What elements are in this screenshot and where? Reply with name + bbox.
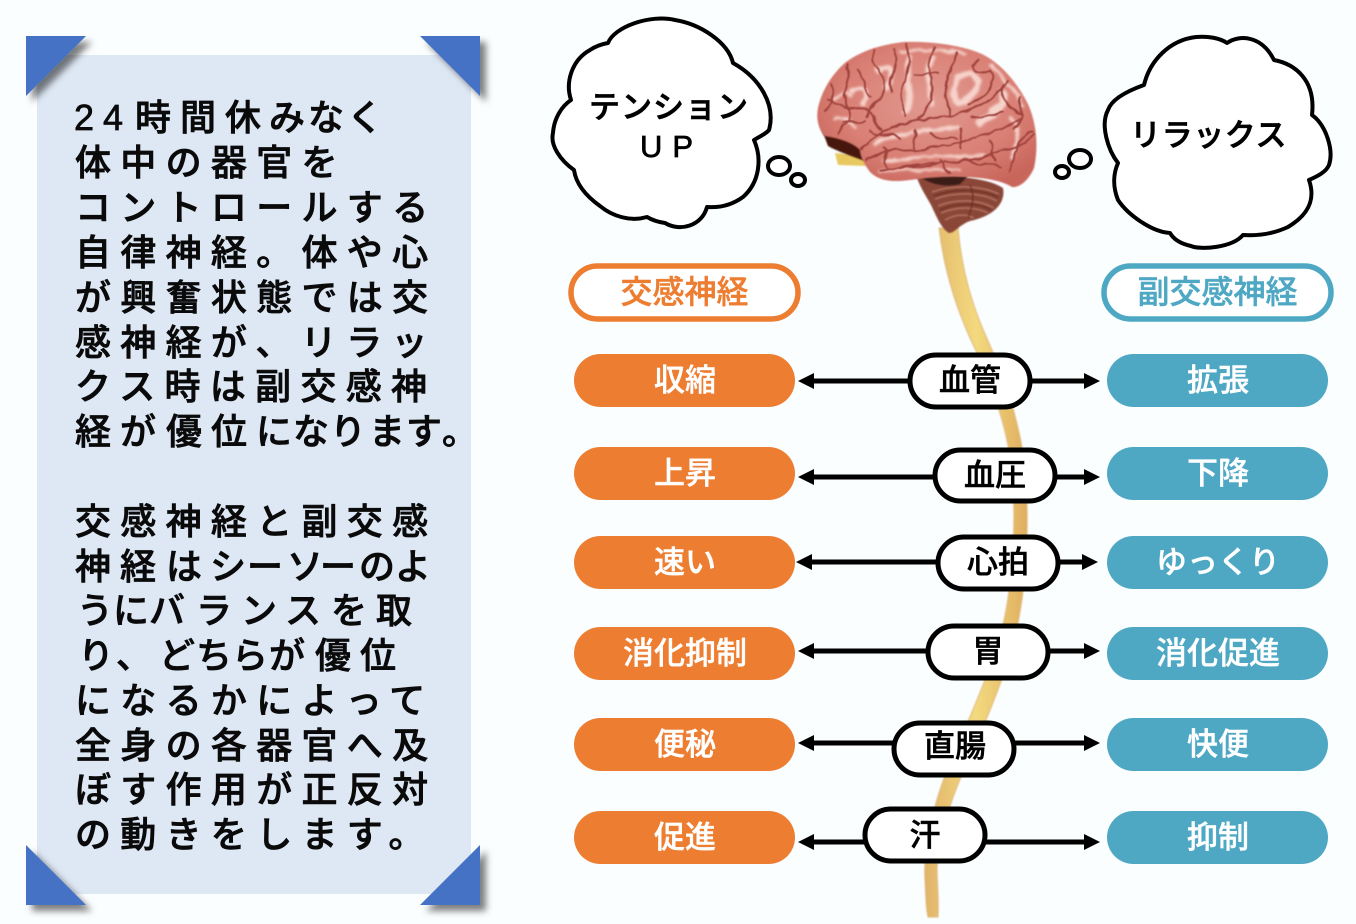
heading: sympathetic nerve: 交感神経 [620, 274, 749, 310]
text block: explanation: うにバランスを取 [77, 590, 412, 631]
effect: constipation: 便秘 [654, 727, 716, 762]
organ: blood vessel [910, 355, 1030, 407]
organ: sweat [865, 809, 985, 861]
cloud text: リラックス [1130, 118, 1287, 153]
effect: good bowel movement [1107, 718, 1328, 771]
text block: explanation [74, 97, 478, 855]
parasympathetic effects [1107, 354, 1328, 864]
heading: parasympathetic nerve [1104, 266, 1331, 319]
effect: fast [574, 536, 795, 589]
brain sulci [824, 44, 1032, 172]
text block: explanation: になるかによって [75, 680, 435, 721]
text block: explanation: 24時間休みなく [74, 97, 383, 138]
arrow: blood pressure [798, 469, 1100, 485]
brain highlights [833, 49, 1022, 172]
sympathetic effects [574, 354, 795, 864]
thought bubbles [768, 157, 790, 175]
text block: explanation: 神経はシーソーのよ [75, 546, 431, 587]
effect: constipation [574, 718, 795, 771]
organ: stomach [928, 626, 1048, 678]
text block: explanation: が興奮状態では交 [75, 277, 437, 318]
arrow: rectum [798, 735, 1100, 751]
effect: digestion promoted [1107, 627, 1328, 680]
organ: rectum: 直腸 [924, 729, 986, 764]
spinal cord [925, 228, 1027, 917]
icon: brain [817, 42, 1036, 233]
effect: suppressed: 抑制 [1187, 820, 1249, 855]
text block: explanation: 全身の各器官へ及 [75, 725, 437, 766]
text block: explanation: 体中の器官を [75, 142, 347, 183]
cerebrum [817, 42, 1036, 187]
arrow: sweat [798, 834, 1100, 850]
text block: explanation: り、どちらが優位 [78, 635, 396, 676]
thought cloud: tension up [552, 19, 805, 227]
effect: fall [1107, 447, 1328, 500]
cerebellum [916, 174, 1003, 233]
olfactory nerve [835, 153, 866, 166]
organ: blood pressure: 血圧 [964, 458, 1026, 493]
organ: rectum [894, 723, 1014, 775]
thought bubbles [1069, 150, 1091, 168]
text block: explanation: の動きをします。 [75, 814, 434, 855]
organ: sweat: 汗 [910, 818, 940, 853]
effect: fast: 速い [654, 545, 716, 580]
organ: stomach: 胃 [972, 634, 1004, 669]
effect: rise [574, 447, 795, 500]
effect: dilation: 拡張 [1187, 363, 1249, 398]
thought cloud: tension up: UP [640, 129, 703, 164]
effect: suppressed [1107, 811, 1328, 864]
effect: dilation [1107, 354, 1328, 407]
thought cloud: relax [1055, 37, 1330, 248]
cloud outline [1105, 37, 1330, 248]
organ: heart rate: 心拍 [967, 545, 1029, 580]
effect: digestion suppressed [574, 627, 795, 680]
heading: sympathetic nerve [571, 266, 798, 319]
organ: blood vessel: 血管 [939, 363, 1001, 398]
effect: slow [1107, 536, 1328, 589]
text block: explanation: クス時は副交感神 [75, 366, 436, 407]
organ: blood pressure [935, 450, 1055, 501]
text block: explanation: 経が優位になります。 [75, 411, 478, 452]
arrow: blood vessel [798, 373, 1100, 389]
effect: rise: 上昇 [654, 456, 716, 491]
effect: digestion suppressed: 消化抑制 [623, 636, 747, 671]
text block: explanation: 感神経が、リラッ [75, 322, 437, 363]
effect: good bowel movement: 快便 [1187, 727, 1249, 762]
effect: promoted: 促進 [654, 820, 716, 855]
effect: promoted [574, 811, 795, 864]
text block: explanation: ぼす作用が正反対 [75, 769, 437, 810]
arrow: stomach [798, 643, 1100, 659]
organ labels [865, 355, 1058, 861]
arrow: heart rate [796, 554, 1098, 570]
text block: explanation: 交感神経と副交感 [75, 501, 437, 542]
effect: slow: ゆっくり [1156, 545, 1280, 580]
text block: explanation: 自律神経。体や心 [75, 232, 437, 273]
note sheet [37, 55, 471, 894]
frontal shadow [822, 130, 868, 162]
effect: digestion promoted: 消化促進 [1156, 636, 1280, 671]
effect: contraction [574, 354, 795, 407]
panel: description note [26, 36, 480, 905]
heading: parasympathetic nerve: 副交感神経 [1137, 274, 1298, 310]
effect: fall: 下降 [1187, 456, 1249, 491]
cloud text: テンション [589, 90, 749, 125]
cloud outline [552, 19, 771, 227]
note corners [26, 36, 480, 905]
arrows [796, 373, 1100, 850]
text block: explanation: コントロールする [75, 187, 437, 228]
effect: contraction: 収縮 [654, 363, 716, 398]
organ: heart rate [938, 537, 1058, 589]
